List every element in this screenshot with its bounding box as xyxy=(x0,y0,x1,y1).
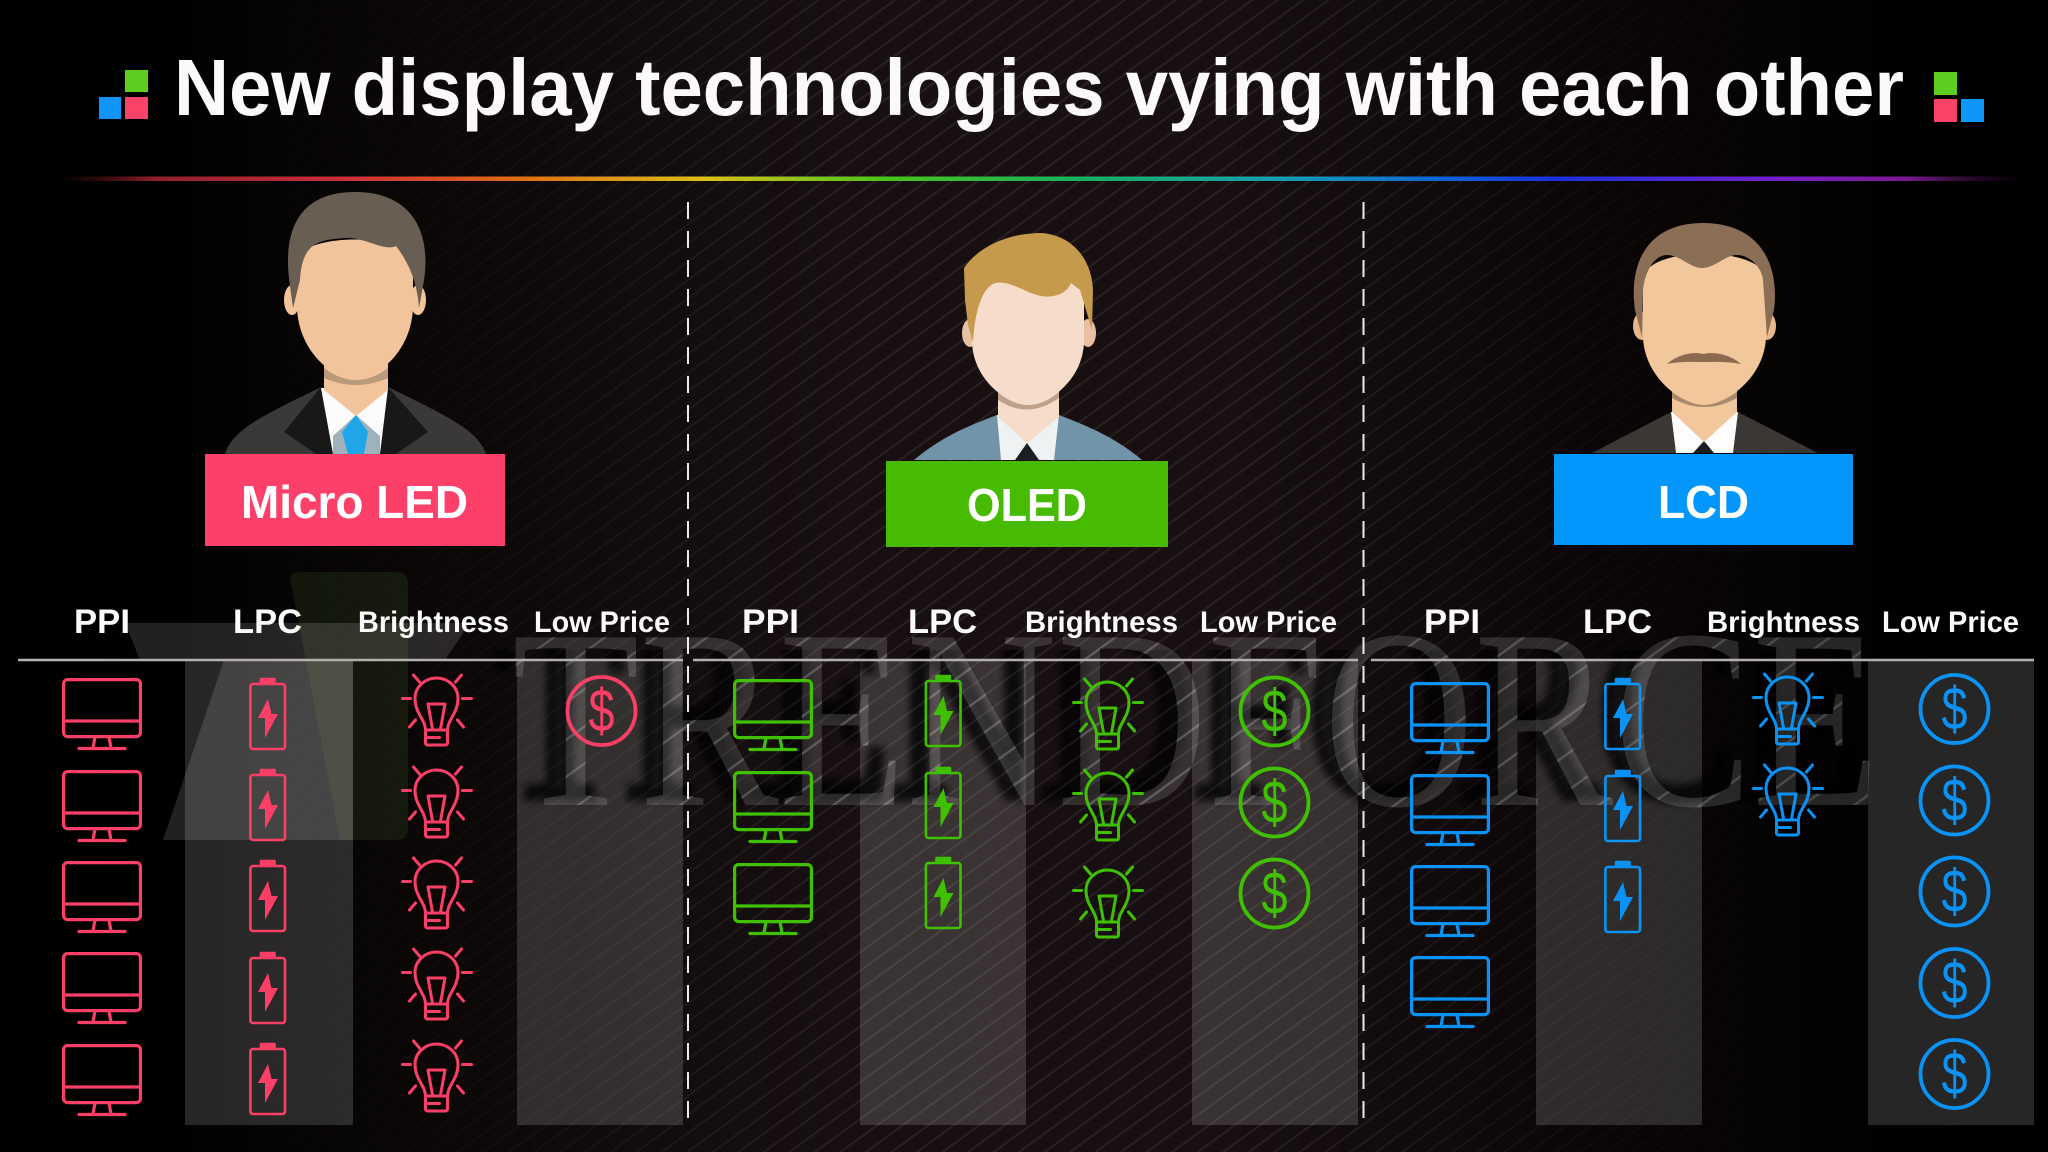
icon: dollar coin 2 xyxy=(1920,766,1988,834)
title text: New display technologies vying with each other xyxy=(174,43,1904,132)
panel: Micro LED xyxy=(64,192,670,1114)
icon: dollar coin 2: $ xyxy=(1261,769,1288,836)
column headers: LPC xyxy=(908,603,977,641)
icon: bulb 3 xyxy=(1074,867,1142,937)
icon: monitor 4 xyxy=(1412,958,1488,1026)
icon: monitor 3 xyxy=(1412,867,1488,936)
icon: left pixel squares xyxy=(99,70,148,119)
panel: LCD xyxy=(1412,223,2019,1108)
column headers: LPC xyxy=(233,603,302,641)
icon: right pixel squares xyxy=(1934,72,1984,122)
icon: battery 2 xyxy=(1605,771,1640,841)
column headers: Low Price xyxy=(1200,606,1337,639)
icon: battery 1 xyxy=(250,679,285,749)
icon: battery 1 xyxy=(1605,679,1640,749)
icons: OLED ratings xyxy=(735,676,1308,937)
label: LCD xyxy=(1554,454,1853,545)
icon: dollar coin 1: $ xyxy=(1261,678,1288,745)
icon: battery 4 xyxy=(250,953,285,1023)
icon: bulb 2 xyxy=(402,767,472,837)
column headers xyxy=(1424,603,2019,641)
column headers xyxy=(742,603,1337,641)
label: OLED xyxy=(886,461,1168,547)
column bands xyxy=(185,660,2034,1125)
panel: OLED xyxy=(735,233,1337,937)
column headers: LPC xyxy=(1583,603,1652,641)
icon: dollar coin 4: $ xyxy=(1941,949,1968,1016)
icon: monitor 2 xyxy=(64,772,140,840)
label: LCD: LCD xyxy=(1658,476,1749,528)
column headers xyxy=(74,603,670,641)
label: Micro LED: Micro LED xyxy=(241,476,468,528)
watermark logo xyxy=(125,572,470,840)
icon: bulb 1 xyxy=(1754,674,1822,744)
icon: dollar coin 5 xyxy=(1920,1040,1988,1108)
icon: dollar coin 3: $ xyxy=(1261,860,1288,927)
column headers: PPI xyxy=(74,603,130,641)
person: LCD presenter xyxy=(1592,223,1818,453)
column headers: Brightness xyxy=(1707,606,1860,639)
icon: dollar coin 3: $ xyxy=(1941,858,1968,925)
icon: dollar coin 2: $ xyxy=(1941,767,1968,834)
column headers: Brightness xyxy=(1025,606,1178,639)
title xyxy=(99,43,1984,132)
icon: battery 2 xyxy=(926,768,960,838)
icon: bulb 1 xyxy=(1074,679,1142,749)
label: OLED: OLED xyxy=(967,479,1087,531)
person: Micro LED presenter xyxy=(225,192,486,454)
icon: monitor 3 xyxy=(735,865,811,934)
icon: battery 3 xyxy=(1605,862,1640,932)
icon: monitor 1 xyxy=(735,681,811,750)
icons: LCD ratings xyxy=(1412,674,1988,1108)
icon: bulb 3 xyxy=(402,858,472,928)
icon: dollar coin 5: $ xyxy=(1941,1040,1968,1107)
icon: dollar coin 1 xyxy=(1240,678,1308,746)
icon: monitor 2 xyxy=(1412,776,1488,844)
icon: dollar coin 1 xyxy=(1920,675,1988,743)
person: OLED presenter xyxy=(914,233,1142,460)
icon: bulb 4 xyxy=(402,949,472,1019)
icon: dollar coin 1: $ xyxy=(1941,675,1968,742)
icon: monitor 2 xyxy=(735,773,811,842)
icon: dollar coin 3 xyxy=(1920,858,1988,926)
icon: monitor 5 xyxy=(64,1046,140,1114)
column headers: PPI xyxy=(742,603,799,641)
icon: monitor 1 xyxy=(64,680,140,748)
icon: bulb 2 xyxy=(1074,770,1142,840)
icon: monitor 1 xyxy=(1412,684,1488,752)
icon: dollar coin 1: $ xyxy=(588,677,615,744)
rainbow divider xyxy=(58,176,2024,181)
icon: monitor 4 xyxy=(64,954,140,1022)
column headers: PPI xyxy=(1424,603,1480,641)
icon: dollar coin 4 xyxy=(1920,949,1988,1017)
column headers: Low Price xyxy=(534,606,670,639)
icon: dollar coin 1 xyxy=(568,677,636,745)
icons: Micro LED ratings xyxy=(64,675,636,1114)
icon: battery 1 xyxy=(926,676,960,746)
icon: dollar coin 3 xyxy=(1240,860,1308,928)
icon: battery 3 xyxy=(926,858,960,928)
icon: bulb 2 xyxy=(1754,765,1822,835)
column dividers xyxy=(688,202,1364,1130)
icon: dollar coin 2 xyxy=(1240,768,1308,836)
column headers: Brightness xyxy=(358,606,509,639)
icon: bulb 5 xyxy=(402,1041,472,1111)
label: Micro LED xyxy=(205,454,505,546)
icon: battery 2 xyxy=(250,770,285,840)
icon: battery 5 xyxy=(250,1044,285,1114)
icon: battery 3 xyxy=(250,861,285,931)
icon: bulb 1 xyxy=(402,675,472,745)
icon: monitor 3 xyxy=(64,863,140,932)
column headers: Low Price xyxy=(1882,606,2019,639)
diagonal stripes xyxy=(630,0,1509,1152)
header rules xyxy=(18,659,2034,661)
